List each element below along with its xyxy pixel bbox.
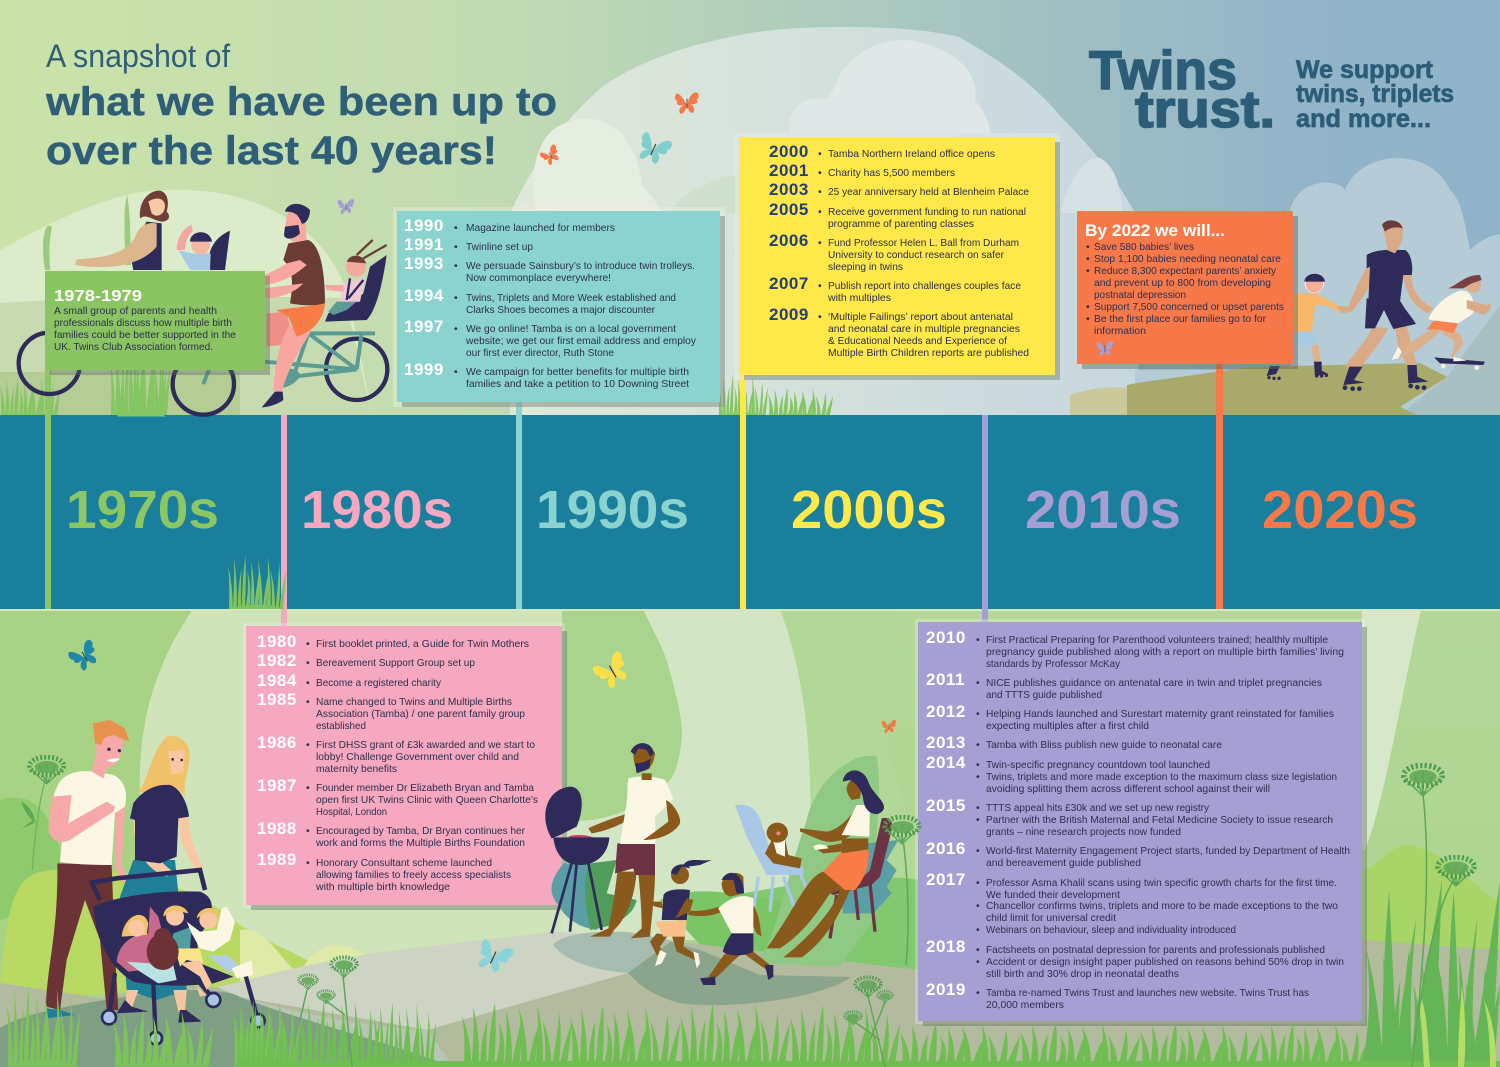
bullet list: • [818,311,822,323]
years: 1984 [257,671,297,690]
bullet list: and neonatal care in multiple pregnancies [828,323,1020,335]
years: 2007 [769,274,809,293]
bullet list: University to conduct research on safer [828,249,1004,261]
years: 2012 [926,702,966,721]
logo: Twins Trust: and more... [1296,105,1431,133]
illustration: couple with triplets in a pushchair [7,720,300,1067]
text block: families could be better supported in the [54,329,236,341]
bullet list: • [976,877,980,889]
panel: 1978-1979 [45,271,270,375]
bullet list: First booklet printed, a Guide for Twin Mothers [316,638,529,650]
bullet list: Charity has 5,500 members [828,167,955,179]
bullet list: • [306,657,310,669]
bullet list: • [454,366,458,378]
bullet list: lobby! Challenge Government over child and [316,751,519,763]
decade labels: 2000s [791,480,947,540]
bullet list: • [454,323,458,335]
bullet list: • [306,677,310,689]
bullet list: still birth and 30% drop in neonatal deaths [986,968,1179,980]
bullet list: Reduce 8,300 expectant parents’ anxiety [1094,265,1277,277]
bullet list: • [306,739,310,751]
logo: Twins Trust: twins, triplets [1296,80,1454,108]
years: 2018 [926,937,966,956]
years: 2003 [769,180,809,199]
bullet list: standards by Professor McKay [986,658,1121,670]
decade labels: 2020s [1262,480,1418,540]
bullet list: • [976,708,980,720]
bullet list: allowing families to freely access specialists [316,869,511,881]
years: 2005 [769,200,809,219]
bullet list: Stop 1,100 babies needing neonatal care [1094,253,1281,265]
bullet list: • [976,677,980,689]
bullet list: Twinline set up [466,241,533,253]
text block: A small group of parents and health [54,305,217,317]
bullet list: Encouraged by Tamba, Dr Bryan continues her [316,825,525,837]
bullet list: • [818,148,822,160]
bullet list: our first ever director, Ruth Stone [466,347,614,359]
bullet list: Accident or design insight paper published on reasons behind 50% drop in twin [986,956,1344,968]
bullet list [306,638,538,893]
years [257,632,297,869]
years: 1982 [257,651,297,670]
bullet list: We campaign for better benefits for multiple birth [466,366,689,378]
grass tuft on band [228,555,286,609]
background: lower meadow [0,609,1500,1067]
bullet list: avoiding splitting them across different school against their will [986,783,1270,795]
years: 2014 [926,753,966,772]
bullet list: First Practical Preparing for Parenthood volunteers trained; healthly multiple [986,634,1328,646]
bullet list: Save 580 babies’ lives [1094,241,1194,253]
icon: butterfly [1097,341,1113,356]
bullet list: • [976,739,980,751]
bullet list: We funded their development [986,889,1120,901]
bullet list: Chancellor confirms twins, triplets and more to be made exceptions to the two [986,900,1338,912]
bullet list: Factsheets on postnatal depression for parents and professionals published [986,944,1325,956]
bullet list: with multiples [827,292,891,304]
bullet list: • [306,782,310,794]
bullet list: families and take a petition to 10 Downing Street [466,378,689,390]
bullet list: Helping Hands launched and Surestart maternity grant reinstated for families [986,708,1334,720]
years: 2001 [769,161,809,180]
bullet list: Bereavement Support Group set up [316,657,475,669]
bullet list: • [454,292,458,304]
bullet list [454,222,697,390]
years: 1997 [404,317,444,336]
bullet list [818,148,1029,359]
bullet list: Tamba re-named Twins Trust and launches new website. Twins Trust has [986,987,1309,999]
bullet list: • [976,802,980,814]
text block: UK. Twins Club Association formed. [54,341,213,353]
logo: Twins Trust [1089,39,1454,139]
bullet list: Clarks Shoes becomes a major discounter [466,304,655,316]
bullet list: • [1086,241,1090,253]
years: 1989 [257,850,297,869]
years: 1988 [257,819,297,838]
bullet list: TTTS appeal hits £30k and we set up new registry [986,802,1210,814]
bullet list: Name changed to Twins and Multiple Births [316,696,512,708]
heading: by 2022: By 2022 we will... [1085,221,1225,240]
bullet list: and bereavement guide published [986,857,1141,869]
bullet list: work and forms the Multiple Births Foundation [315,837,525,849]
bullet list: expecting multiples after a first child [986,720,1149,732]
bullet list: • [818,206,822,218]
text block: professionals discuss how multiple birth [54,317,232,329]
bullet list: • [976,845,980,857]
years: 1985 [257,690,297,709]
bullet list: and prevent up to 800 from developing [1094,277,1271,289]
bullet list: Partner with the British Maternal and Fetal Medicine Society to issue research [986,814,1333,826]
years: 1999 [404,360,444,379]
panel: 1990s [393,207,725,407]
years: 1990 [404,216,444,235]
bullet list: Become a registered charity [316,677,442,689]
title: what we have been up to [45,80,557,124]
title: A snapshot of [46,38,230,74]
years: 1980 [257,632,297,651]
bullet list [976,634,1350,1011]
decade labels: 1980s [301,480,453,540]
bullet list: information [1094,325,1146,337]
bullet list: postnatal depression [1094,289,1186,301]
bullet list: • [818,186,822,198]
bullet list: Webinars on behaviour, sleep and individuality introduced [986,924,1236,936]
bullet list: Twins, Triplets and More Week established and [466,292,676,304]
years: 2015 [926,796,966,815]
bullet list: • [976,956,980,968]
bullet list: • [976,814,980,826]
years [926,628,966,999]
illustration: family on bicycle [19,191,387,417]
bullet list: Tamba Northern Ireland office opens [828,148,995,160]
decade labels: 1990s [536,480,689,540]
bullet list: website; we get our first email address and employ [465,335,697,347]
bullet list: grants – nine research projects now funded [986,826,1181,838]
bullet list: We go online! Tamba is on a local government [466,323,676,335]
bullet list: • [454,260,458,272]
bullet list: • [454,222,458,234]
bullet list: First DHSS grant of £3k awarded and we start to [316,739,535,751]
bullet list: • [1086,265,1090,277]
butterflies [66,92,896,977]
bullet list: • [306,638,310,650]
timeline band [0,415,1500,609]
bullet list: • [306,825,310,837]
years: 2009 [769,305,809,324]
bullet list: established [316,720,366,732]
bullet list: Honorary Consultant scheme launched [316,857,492,869]
bullet list: • [306,857,310,869]
bullet list: • [818,167,822,179]
bullet list: • [976,771,980,783]
bullet list [1086,241,1284,337]
bullet list: Hospital, London [316,806,387,818]
bullet list: Now commonplace everywhere! [466,272,611,284]
background: sky and hills [0,0,1500,416]
bullet list: We persuade Sainsbury’s to introduce twin trolleys. [466,260,695,272]
bullet list: • [1086,313,1090,325]
illustration: family on roller skates [1267,220,1492,391]
bullet list: • [976,634,980,646]
bullet list: Founder member Dr Elizabeth Bryan and Tamba [316,782,534,794]
years [769,142,809,324]
bullet list: Magazine launched for members [466,222,615,234]
title [45,38,557,173]
text block [54,305,236,353]
bullet list: NICE publishes guidance on antenatal care in twin and triplet pregnancies [986,677,1322,689]
bullet list: programme of parenting classes [828,218,974,230]
years: 1986 [257,733,297,752]
panel: 1980s [243,623,567,910]
years: 2013 [926,733,966,752]
bullet list: • [976,924,980,936]
years: 1991 [404,235,444,254]
bullet list: open first UK Twins Clinic with Queen Charlotte’s [316,794,538,806]
bullet list: 20,000 members [986,999,1064,1011]
bullet list: Be the first place our families go to for [1094,313,1266,325]
years [404,216,444,379]
years: 1994 [404,286,444,305]
bullet list: Support 7,500 concerned or upset parents [1094,301,1284,313]
bullet list: • [818,280,822,292]
logo: Twins Trust: We support [1296,56,1434,84]
heading: 1978-1979: 1978-1979 [54,288,142,305]
bullet list: Association (Tamba) / one parent family group [316,708,525,720]
bullet list: Publish report into challenges couples face [828,280,1021,292]
bullet list: • [976,944,980,956]
bullet list: • [306,696,310,708]
panel: by 2022 [1077,211,1298,369]
decade labels: 2010s [1025,480,1181,540]
title: over the last 40 years! [46,129,497,173]
bullet list: & Educational Needs and Experience of [828,335,1007,347]
bullet list: • [454,241,458,253]
bullet list: • [1086,301,1090,313]
decade colour lines [45,362,1223,630]
years: 1987 [257,776,297,795]
bullet list: Professor Asma Khalil scans using twin specific growth charts for the first time. [986,877,1337,889]
bullet list: • [1086,253,1090,265]
years: 2000 [769,142,809,161]
decade labels: 1970s [66,480,219,540]
bullet list: 25 year anniversary held at Blenheim Palace [828,186,1029,198]
bullet list: Tamba with Bliss publish new guide to neonatal care [986,739,1222,751]
bullet list: • [818,237,822,249]
bullet list: sleeping in twins [828,261,903,273]
years: 1993 [404,254,444,273]
bullet list: Multiple Birth Children reports are published [828,347,1029,359]
bullet list: and TTTS guide published [986,689,1102,701]
years: 2010 [926,628,966,647]
panel: 2000s [735,133,1060,380]
bullet list: • [976,900,980,912]
logo: Twins Trust: Twins [1089,39,1237,101]
bullet list: Receive government funding to run national [828,206,1026,218]
bullet list: Twins, triplets and more made exception to the maximum class size legislation [986,771,1337,783]
bullet list: pregnancy guide published along with a report on multiple birth families’ living [986,646,1344,658]
bullet list: Fund Professor Helen L. Ball from Durham [828,237,1019,249]
bullet list: with multiple birth knowledge [315,881,450,893]
years: 2006 [769,231,809,250]
years: 2016 [926,839,966,858]
bullet list: Twin-specific pregnancy countdown tool launched [986,759,1210,771]
grass tufts on the upper hills [0,195,833,416]
panel: 2010s [915,619,1367,1026]
logo: Twins Trust: trust. [1135,81,1275,139]
illustration: family barbecue [545,743,898,985]
bullet list: • [976,759,980,771]
bullet list: World-first Maternity Engagement Project starts, funded by Department of Health [986,845,1350,857]
bullet list: • [976,987,980,999]
bullet list: child limit for universal credit [986,912,1116,924]
years: 2017 [926,870,966,889]
bullet list: ‘Multiple Failings’ report about antenatal [828,311,1013,323]
bullet list: maternity benefits [316,763,397,775]
plants: wild umbels [299,765,1474,1067]
decade labels [66,480,1418,540]
years: 2011 [926,670,965,689]
years: 2019 [926,980,966,999]
foreground grass [236,880,1500,1067]
